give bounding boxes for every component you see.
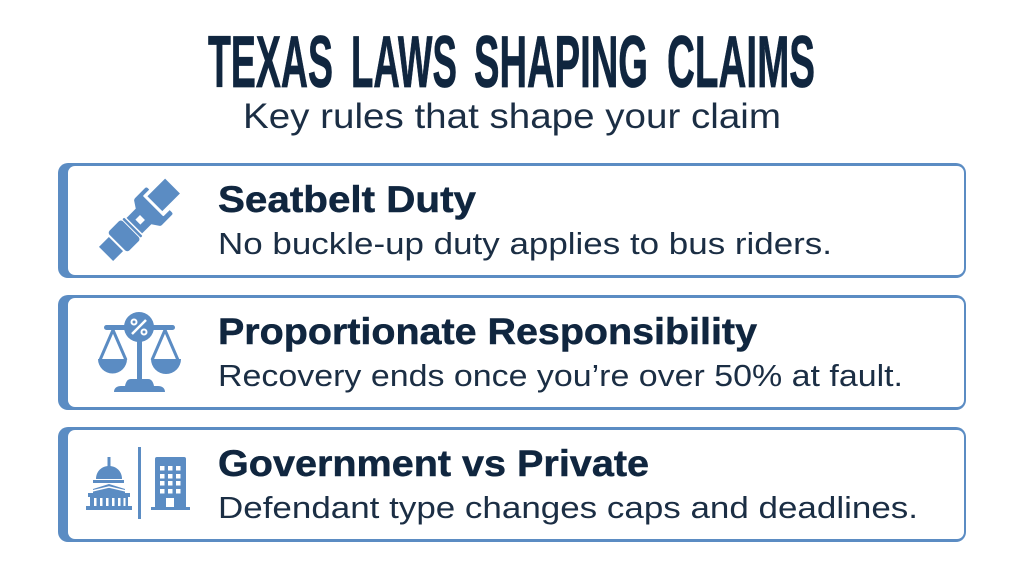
title: CLAIMS <box>667 22 815 103</box>
icon: capitol building <box>86 457 132 510</box>
heading: government vs private: Government vs Private <box>218 443 649 484</box>
title: SHAPING <box>474 22 648 103</box>
icon: scales with percent <box>98 312 181 392</box>
panel: government vs private <box>58 427 966 542</box>
divider <box>138 447 141 519</box>
panel: seatbelt duty <box>58 163 966 278</box>
heading: proportionate responsibility: Proportionate Responsibility <box>218 311 757 352</box>
text: government vs private: Defendant type changes caps and deadlines. <box>218 490 918 525</box>
heading: seatbelt duty: Seatbelt Duty <box>218 179 476 220</box>
title: LAWS <box>351 22 457 103</box>
title <box>208 22 815 103</box>
icon: seatbelt <box>93 173 187 267</box>
icon: office building <box>151 457 190 510</box>
text: seatbelt duty: No buckle-up duty applies to bus riders. <box>218 226 832 261</box>
panel: proportionate responsibility <box>58 295 966 410</box>
title: TEXAS <box>208 22 333 103</box>
subtitle: Key rules that shape your claim <box>243 97 781 136</box>
text: proportionate responsibility: Recovery ends once you’re over 50% at fault. <box>218 358 903 393</box>
